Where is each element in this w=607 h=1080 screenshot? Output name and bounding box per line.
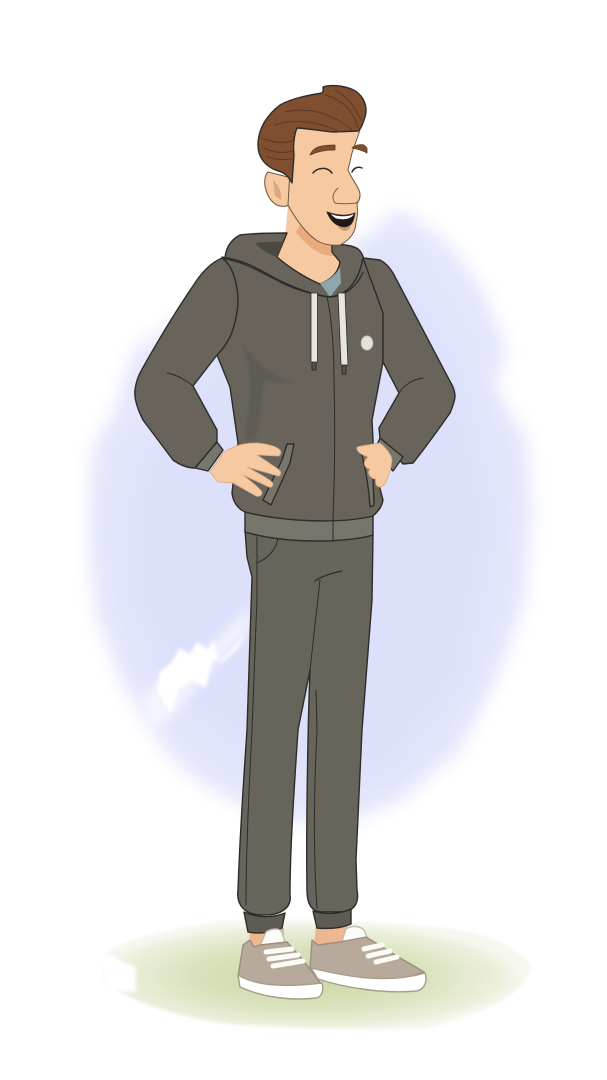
- figure: [135, 86, 455, 999]
- face: [288, 128, 360, 245]
- hoodie: left arm: [135, 258, 238, 468]
- right shoe: [310, 926, 426, 992]
- t-shirt collar: [320, 267, 341, 297]
- left eyebrow: [310, 145, 335, 155]
- neck shadow under chin: [296, 225, 345, 256]
- hoodie: right arm: [363, 258, 455, 464]
- chest badge: [361, 336, 373, 350]
- right drawstring: [338, 293, 348, 374]
- right hand: [357, 443, 392, 487]
- hoodie: hood: [225, 233, 364, 305]
- hoodie: inner hood shadow: [255, 242, 283, 257]
- hoodie: torso: [217, 257, 383, 542]
- right ankle: [314, 925, 348, 946]
- hair: [258, 86, 366, 183]
- right eyebrow: [352, 145, 367, 153]
- hoodie: right cuff: [374, 438, 403, 471]
- hoodie: left cuff: [195, 442, 223, 471]
- mouth: [327, 212, 355, 231]
- hoodie: waistband: [245, 512, 373, 541]
- right pocket: [358, 447, 374, 507]
- pants: [238, 530, 373, 915]
- ear: [265, 172, 292, 206]
- right pants cuff: [313, 909, 351, 929]
- left pocket: [263, 444, 294, 505]
- neck: [272, 205, 342, 296]
- left ankle: [249, 928, 284, 950]
- left drawstring: [311, 293, 318, 370]
- background: lavender watercolor wash: [88, 208, 532, 825]
- left shoe: [238, 929, 323, 999]
- left hand: [210, 443, 281, 496]
- left pants cuff: [244, 912, 285, 933]
- closed eyes: [313, 167, 362, 173]
- background: grass ground patch: [100, 920, 531, 1030]
